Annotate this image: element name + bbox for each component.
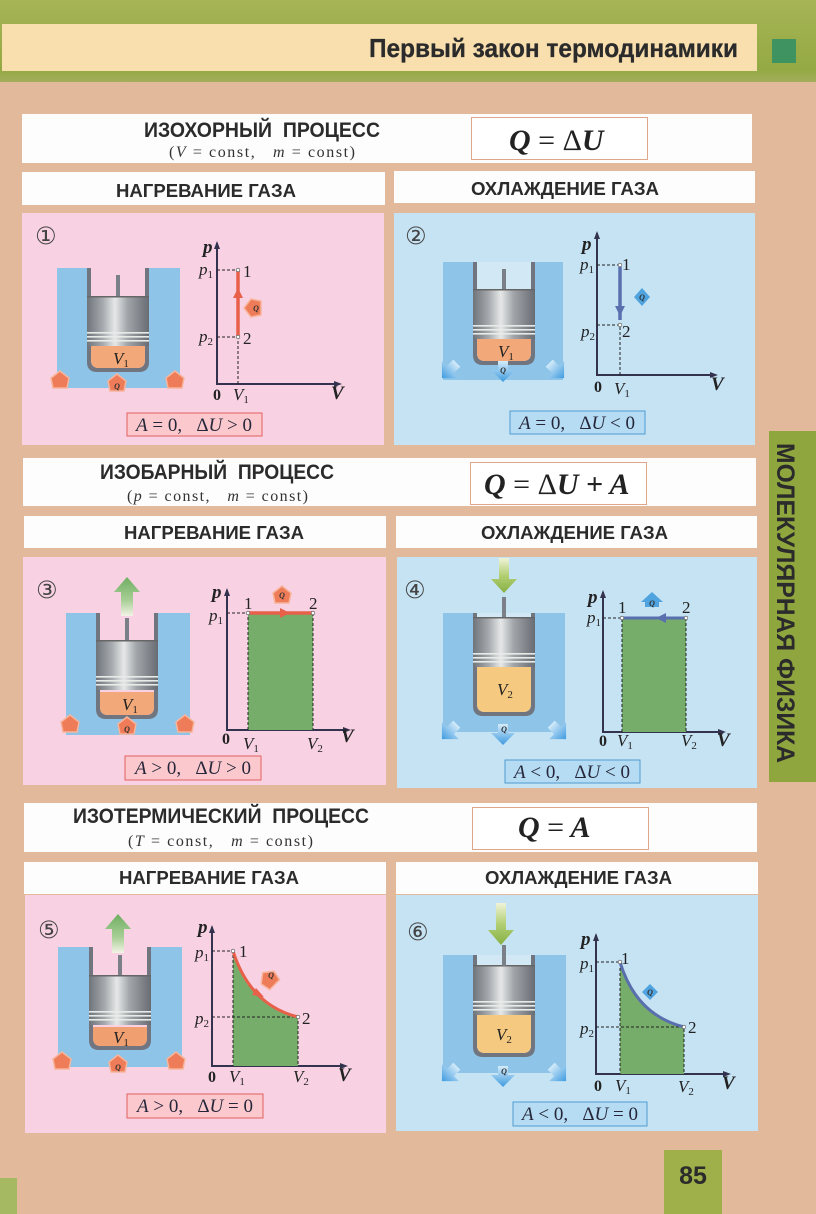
pV graph 2: 2	[622, 322, 630, 341]
pV graph 6: V	[722, 1073, 736, 1094]
panel 5: isothermal heating	[25, 895, 386, 1133]
condition 5: A > 0, ΔU = 0	[135, 1096, 253, 1117]
pV graph 2	[579, 231, 725, 400]
cylinder 2	[433, 262, 573, 387]
pV graph 5: p	[196, 917, 208, 938]
pV graph 1: 1	[243, 262, 252, 281]
cylinder 6: V	[496, 1025, 506, 1044]
pV graph 2: 1	[622, 255, 630, 274]
pV graph 6: 2	[688, 1018, 696, 1037]
cylinder 6: 2	[506, 1034, 512, 1046]
section header: isochoric: (V = const, m = const)	[169, 144, 355, 161]
side tab: МОЛЕКУЛЯРНАЯ ФИЗИКА	[771, 443, 799, 763]
pV graph 4: p	[586, 587, 598, 608]
pV graph 4: V	[717, 730, 731, 751]
pV graph 1: V	[331, 383, 345, 404]
pV graph 3: p	[210, 582, 222, 603]
subhead: cooling 2: ОХЛАЖДЕНИЕ ГАЗА	[481, 522, 668, 543]
section header: isobaric: (p = const, m = const)	[127, 488, 308, 505]
cylinder 1	[51, 268, 184, 391]
pV graph 5: 1	[239, 942, 248, 961]
formula	[472, 808, 648, 850]
pV graph 4: 1	[618, 598, 626, 617]
pV graph 6: V	[678, 1077, 691, 1096]
cylinder 3	[61, 577, 194, 735]
subhead: heating 3	[24, 862, 386, 894]
cylinder 5: V	[113, 1028, 123, 1047]
pV graph 2: 1	[624, 388, 630, 400]
section header: isochoric	[22, 114, 752, 163]
pV graph 5: 0	[208, 1069, 216, 1086]
subhead: cooling 3	[396, 862, 758, 894]
cylinder 4: 2	[507, 689, 513, 701]
pV graph 6: Q	[647, 988, 653, 997]
pV graph 5: V	[229, 1067, 242, 1086]
pV graph 5: p	[194, 943, 204, 962]
pV graph 3: 2	[317, 743, 323, 755]
formula: Q = A	[518, 811, 590, 844]
cylinder 1: 1	[123, 358, 129, 370]
formula	[470, 462, 646, 504]
panel 6: isothermal cooling	[396, 895, 758, 1131]
condition 1: A = 0, ΔU > 0	[134, 415, 252, 436]
pV graph 2: p	[580, 322, 590, 341]
pV graph 4: Q	[649, 599, 655, 608]
panel 1: isochoric heating: ①	[35, 222, 57, 250]
cylinder 5	[53, 914, 185, 1072]
condition 4: A < 0, ΔU < 0	[512, 762, 630, 783]
pV graph 5: Q	[268, 971, 274, 980]
cylinder 6: Q	[501, 1067, 507, 1076]
panel 5: isothermal heating: ⑤	[38, 916, 60, 944]
pV graph 5: 1	[239, 1076, 245, 1088]
pV graph 1	[198, 237, 345, 406]
title bar	[2, 24, 757, 71]
cylinder 2: Q	[500, 366, 506, 375]
section header: isochoric: ИЗОХОРНЫЙ ПРОЦЕСС	[144, 118, 380, 142]
pV graph 5: p	[194, 1009, 204, 1028]
pV graph 4	[586, 587, 731, 752]
pV graph 3: p	[208, 606, 218, 625]
subhead: cooling 1	[394, 171, 755, 203]
pV graph 2: Q	[639, 293, 645, 302]
panel 4: isobaric cooling	[397, 557, 757, 788]
cylinder 4: Q	[501, 725, 507, 734]
cylinder 2: 1	[508, 351, 514, 363]
pV graph 3: 1	[244, 594, 252, 613]
work arrow up	[114, 577, 140, 616]
pV graph 5: 2	[303, 1076, 309, 1088]
section header: isothermal: (T = const, m = const)	[128, 833, 313, 850]
pV graph 6: p	[579, 929, 590, 950]
pV graph 3	[208, 582, 355, 755]
pV graph 6: V	[615, 1076, 628, 1095]
pV graph 2: 1	[588, 264, 594, 276]
pV graph 4: 2	[682, 598, 690, 617]
panel 4: isobaric cooling: ④	[404, 576, 426, 604]
pV graph 1: 1	[243, 394, 249, 406]
formula: Q = ΔU	[509, 124, 605, 157]
panel 3: isobaric heating	[23, 557, 386, 785]
pV graph 4: V	[617, 731, 630, 750]
work arrow down	[488, 903, 514, 945]
pV graph 6: 1	[588, 963, 594, 975]
subhead: heating 2	[24, 516, 386, 548]
cylinder 3: V	[122, 695, 132, 714]
pV graph 5: 2	[204, 1018, 209, 1030]
pV graph 3: V	[341, 726, 355, 747]
pV graph 6: 1	[621, 949, 630, 968]
pV graph 1: p	[198, 327, 208, 346]
pV graph 1: 1	[208, 269, 213, 281]
subhead: cooling 3: ОХЛАЖДЕНИЕ ГАЗА	[485, 867, 672, 888]
pV graph 5: 1	[204, 952, 209, 964]
page number	[664, 1150, 722, 1214]
pV graph 4: 1	[596, 617, 601, 629]
pV graph 6: 2	[588, 1028, 594, 1040]
page number: 85	[679, 1162, 707, 1190]
panel 2: isochoric cooling	[394, 213, 755, 445]
pV graph 1: 2	[208, 336, 213, 348]
pV graph 2: 2	[590, 331, 595, 343]
work arrow up	[105, 914, 131, 953]
subhead: heating 2: НАГРЕВАНИЕ ГАЗА	[124, 522, 304, 543]
corner accent	[0, 1178, 17, 1214]
pV graph 5: V	[338, 1065, 352, 1086]
cylinder 6	[433, 903, 575, 1090]
cylinder 5: Q	[115, 1063, 121, 1072]
pV graph 3: 1	[218, 615, 223, 627]
pV graph 3: V	[243, 734, 256, 753]
pV graph 6: p	[579, 954, 588, 973]
pV graph 2: p	[580, 234, 592, 255]
cylinder 2: V	[498, 342, 508, 361]
top green band	[0, 0, 816, 82]
section header: isobaric	[23, 458, 756, 506]
pV graph 1: Q	[253, 304, 259, 313]
subhead: cooling 1: ОХЛАЖДЕНИЕ ГАЗА	[471, 178, 659, 199]
section header: isothermal: ИЗОТЕРМИЧЕСКИЙ ПРОЦЕСС	[73, 804, 369, 828]
subhead: heating 1: НАГРЕВАНИЕ ГАЗА	[116, 180, 296, 201]
pV graph 4: 0	[599, 733, 607, 750]
pV graph 6: 2	[688, 1086, 694, 1098]
condition 3: A > 0, ΔU > 0	[133, 758, 251, 779]
pV graph 6: 1	[625, 1085, 631, 1097]
panel 6: isothermal cooling: ⑥	[407, 918, 429, 946]
pV graph 3: 1	[253, 743, 259, 755]
condition 2: A = 0, ΔU < 0	[517, 413, 635, 434]
pV graph 4: p	[586, 608, 596, 627]
pV graph 5: V	[293, 1067, 306, 1086]
work arrow down	[491, 558, 517, 593]
panel 3: isobaric heating: ③	[36, 576, 58, 604]
condition 6: A < 0, ΔU = 0	[520, 1104, 638, 1125]
pV graph 3: V	[307, 734, 320, 753]
pV graph 3: 0	[222, 731, 230, 748]
cylinder 4: V	[497, 680, 507, 699]
pV graph 2: 0	[594, 379, 602, 396]
pV graph 4: 2	[691, 740, 697, 752]
pV graph 2: V	[711, 374, 725, 395]
pV graph 1: 2	[243, 329, 252, 348]
section header: isothermal	[24, 803, 757, 852]
pV graph 1: p	[201, 237, 212, 258]
pV graph 1: V	[233, 385, 246, 404]
subhead: heating 3: НАГРЕВАНИЕ ГАЗА	[119, 867, 299, 888]
cylinder 4	[433, 558, 575, 748]
green square marker	[772, 39, 796, 63]
subhead: cooling 2	[396, 516, 757, 548]
pV graph 6: p	[579, 1019, 588, 1038]
title bar: Первый закон термодинамики	[369, 33, 738, 63]
subhead: heating 1	[22, 172, 385, 205]
side tab	[769, 431, 816, 782]
pV graph 2: V	[614, 379, 627, 398]
pV graph 3: 2	[309, 594, 318, 613]
pV graph 6	[579, 929, 736, 1098]
cylinder 5: 1	[123, 1037, 129, 1049]
formula	[472, 118, 648, 160]
pV graph 6: 0	[594, 1078, 602, 1095]
formula: Q = ΔU + A	[484, 468, 630, 501]
section header: isobaric: ИЗОБАРНЫЙ ПРОЦЕСС	[100, 460, 334, 484]
cylinder 1: V	[113, 349, 123, 368]
pV graph 4: 1	[627, 740, 633, 752]
pV graph 1: p	[198, 260, 208, 279]
cylinder 3: 1	[132, 704, 138, 716]
cylinder 1: Q	[114, 382, 120, 391]
pV graph 3: Q	[279, 591, 285, 600]
panel 1: isochoric heating	[22, 213, 384, 445]
pV graph 5: 2	[302, 1009, 310, 1028]
pV graph 2: p	[579, 255, 588, 274]
pV graph 5	[194, 917, 352, 1088]
panel 2: isochoric cooling: ②	[405, 222, 427, 250]
pV graph 1: 0	[213, 387, 221, 404]
pV graph 4: V	[681, 731, 694, 750]
cylinder 3: Q	[124, 725, 130, 734]
